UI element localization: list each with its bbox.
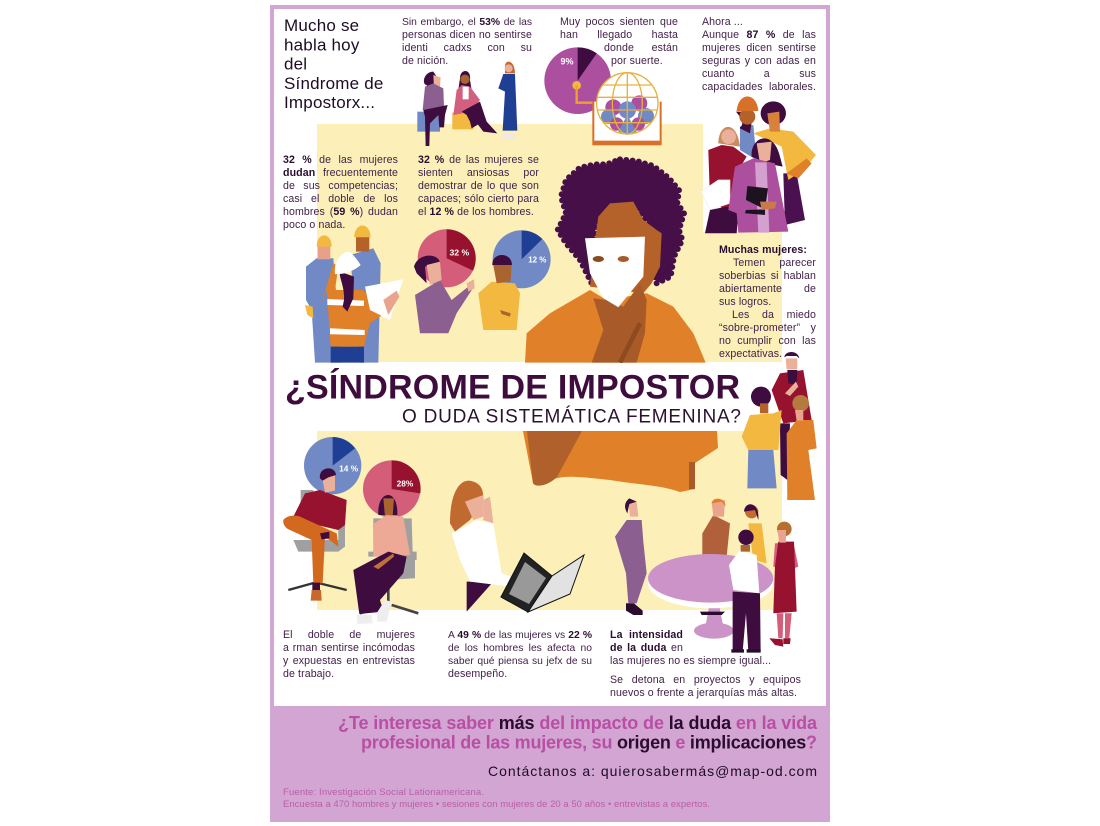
- text: 32 percent anxious: sienten ansiosas por: [418, 166, 539, 178]
- text: 32 percent doubt: poco o nada.: [283, 218, 345, 230]
- text: 32 percent anxious: demostrar de lo que son: [418, 180, 539, 192]
- title: ¿SÍNDROME DE IMPOSTOR: [285, 368, 740, 406]
- text: 87 percent feel secure: [702, 16, 816, 93]
- text: many women: Muchas mujeres:: [719, 244, 807, 256]
- text: 53 percent not identified: identi cadxs con su: [402, 42, 532, 54]
- text: 87 percent feel secure: capacidades laborales.: [702, 81, 816, 93]
- text: intensity of doubt: [610, 628, 801, 698]
- text: 53 percent not identified: personas dicen no sentirse: [402, 29, 532, 41]
- white title band: [274, 363, 826, 431]
- pie chart 9 percent: [544, 47, 611, 114]
- text: 32 percent anxious: capaces; sólo cierto para: [418, 192, 539, 204]
- text: intensity of doubt: de la duda en: [610, 642, 683, 654]
- source note: Encuesta a 470 hombres y mujeres • sesiones con mujeres de 20 a 50 años • entrevistas a expertos.: [283, 799, 710, 810]
- text: 32 percent doubt: hombres (59 %) dudan: [283, 206, 398, 218]
- text: interviews: a rman sentirse incómodas: [283, 642, 415, 654]
- text: 32 percent doubt: 32 % de las mujeres: [283, 154, 398, 166]
- text: many women: Temen parecer: [733, 257, 816, 269]
- text: interviews: de trabajo.: [283, 668, 334, 680]
- construction workers: [305, 226, 403, 363]
- pie 14 percent with seated man: 14 %: [339, 463, 359, 473]
- text: many women: sus logros.: [719, 296, 771, 308]
- text: 53 percent not identified: de nición.: [402, 55, 448, 67]
- group of women top right: [701, 96, 816, 233]
- text: many women: no cumplir con las: [719, 335, 816, 347]
- footer call to action: ¿Te interesa saber más del impacto de la duda en la vida: [338, 713, 817, 733]
- pie 14 percent with seated man: [283, 437, 361, 601]
- pie 28 percent with seated woman: 28%: [397, 479, 414, 489]
- text: many women: expectativas.: [719, 348, 782, 360]
- text: very few feel lucky: donde están: [604, 42, 678, 54]
- globe with people in tray: [593, 73, 661, 145]
- text: very few feel lucky: por suerte.: [611, 55, 663, 67]
- pie chart 9 percent: 9%: [560, 56, 573, 66]
- text: intensity of doubt: La intensidad: [610, 628, 683, 640]
- text: many women: “sobre-prometer” y: [719, 322, 816, 334]
- main figure lower body: [523, 431, 718, 492]
- source note: Fuente: Investigación Social Lationamericana.: [283, 787, 484, 798]
- text: very few feel lucky: Muy pocos sienten que: [560, 16, 678, 28]
- text: 32 percent anxious: [418, 154, 539, 218]
- text: many women: Les da miedo: [732, 309, 816, 321]
- text: interviews: [283, 628, 415, 680]
- text: 32 percent doubt: casi el doble de los: [283, 192, 398, 204]
- heading: Mucho se habla hoy: habla hoy: [284, 36, 360, 54]
- heading: Mucho se habla hoy: Mucho se: [284, 16, 359, 35]
- subtitle: O DUDA SISTEMÁTICA FEMENINA?: [402, 406, 741, 428]
- text: 32 percent doubt: de sus competencias;: [283, 180, 398, 192]
- heading: Mucho se habla hoy: Síndrome de: [284, 74, 384, 93]
- text: 53 percent not identified: Sin embargo, el 53% de las: [402, 17, 532, 28]
- text: 87 percent feel secure: Ahora ...: [702, 16, 743, 28]
- text: very few feel lucky: [560, 16, 678, 67]
- text: intensity of doubt: las mujeres no es siempre igual...: [610, 654, 771, 666]
- pie chart 12 percent and man: [478, 230, 551, 330]
- group of three women right: [742, 352, 817, 500]
- footer band: [270, 706, 830, 822]
- text: 53 percent not identified: [402, 17, 532, 67]
- text: 32 percent anxious: 32 % de las mujeres se: [418, 154, 539, 166]
- pie 28 percent with seated woman: [353, 460, 421, 624]
- heading: Mucho se habla hoy: Impostorx...: [284, 93, 375, 112]
- text: 32 percent doubt: dudan frecuentemente: [283, 166, 398, 178]
- text: intensity of doubt: Se detona en proyectos y equipos: [610, 674, 801, 686]
- text: 32 percent anxious: el 12 % de los hombres.: [418, 206, 534, 218]
- main figure with mask: [525, 159, 706, 363]
- pie chart 12 percent and man: 12 %: [528, 256, 546, 265]
- yellow background bottom: [317, 431, 782, 610]
- pie chart 32 percent and woman: 32 %: [449, 248, 469, 258]
- page frame: [270, 5, 830, 710]
- text: 32 percent doubt: [283, 154, 398, 230]
- footer call to action: profesional de las mujeres, su origen e implicaciones?: [361, 732, 817, 752]
- text: intensity of doubt: nuevos o frente a jerarquías más altas.: [610, 686, 797, 698]
- text: 87 percent feel secure: mujeres dicen sentirse: [702, 42, 816, 54]
- text: boss opinion: de los hombres les afecta no: [448, 642, 592, 654]
- text: 87 percent feel secure: seguras y con adas en: [702, 55, 816, 67]
- meeting group around table: [648, 499, 798, 653]
- laptop: [501, 553, 584, 612]
- yellow background top: [317, 124, 782, 362]
- text: very few feel lucky: han llegado hasta: [560, 29, 678, 41]
- text: interviews: El doble de mujeres: [283, 628, 415, 640]
- text: boss opinion: [448, 630, 592, 680]
- woman with laptop: [450, 481, 542, 612]
- three women on cubes: [417, 62, 517, 146]
- text: boss opinion: A 49 % de las mujeres vs 22 %: [448, 630, 592, 640]
- woman standing purple: [615, 498, 647, 615]
- contact line: Contáctanos a: quierosabermás@map-od.com: [488, 763, 817, 779]
- text: 87 percent feel secure: cuanto a sus: [702, 68, 816, 80]
- text: many women: abiertamente de: [719, 283, 816, 295]
- text: many women: soberbias si hablan: [719, 270, 816, 282]
- text: 87 percent feel secure: Aunque 87 % de las: [702, 29, 816, 41]
- pie chart 32 percent and woman: [414, 229, 476, 333]
- text: boss opinion: desempeño.: [448, 668, 507, 680]
- text: many women: [719, 244, 816, 360]
- heading: Mucho se habla hoy: del: [284, 54, 307, 74]
- text: interviews: y expuestas en entrevistas: [283, 654, 415, 666]
- text: boss opinion: saber qué piensa su jefx de su: [448, 656, 592, 666]
